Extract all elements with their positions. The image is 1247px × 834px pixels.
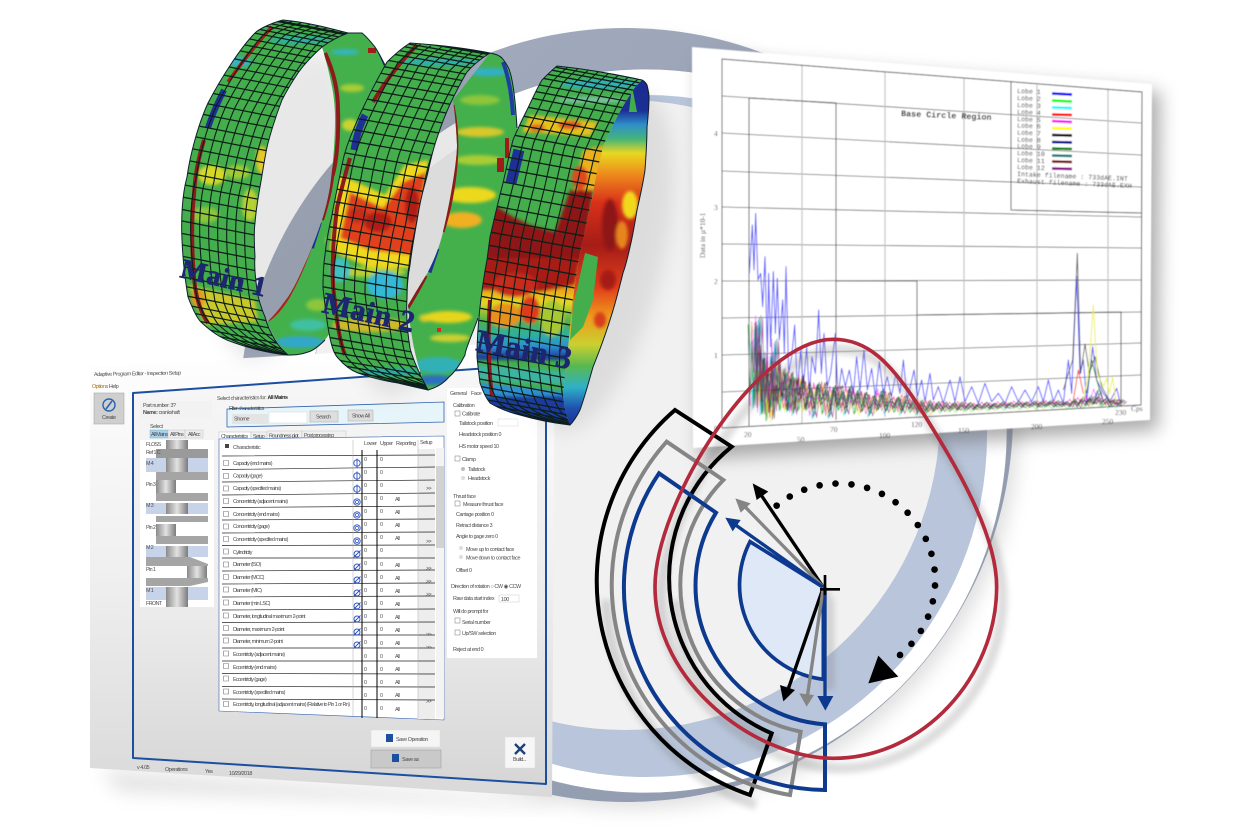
ring 2 inner surface: [408, 54, 517, 390]
settings panel: Calibration: [453, 403, 475, 409]
filter group: [227, 402, 444, 427]
settings panel: Headstock position 0: [459, 432, 501, 438]
row labels and values: Capacity (specified mains): [233, 486, 281, 492]
legend: Lobe 6: [1017, 123, 1041, 131]
row labels and values: 0: [380, 614, 383, 620]
angle arrows: [725, 483, 833, 711]
vertical grid: [802, 65, 1108, 423]
row labels and values: 0: [380, 470, 383, 476]
save as button: [371, 750, 441, 768]
blue content frame: [133, 364, 546, 784]
status bar: Yes: [205, 769, 213, 775]
filter group: Show All: [352, 414, 370, 420]
settings panel: Move up to contact face: [466, 547, 514, 553]
y axis ticks: 1: [714, 351, 718, 360]
row labels and values: 0: [380, 575, 383, 581]
y axis ticks: 3: [714, 203, 718, 212]
table header: Reporting: [396, 441, 416, 447]
row labels and values: 0: [380, 693, 383, 699]
disc shadow: [249, 39, 1019, 809]
row labels and values: 0: [380, 562, 383, 568]
row labels and values: All: [395, 667, 400, 673]
row labels and values: All: [395, 641, 400, 647]
filter group: Shome: [234, 416, 249, 422]
chart shadow: [700, 58, 1160, 458]
setup column shading: [418, 449, 435, 719]
ring: main 3: [476, 66, 650, 426]
ring 3 inner surface: [563, 80, 648, 424]
legend: Lobe 10: [1017, 150, 1045, 158]
row labels and values: All: [395, 589, 400, 595]
row labels and values: 0: [380, 483, 383, 489]
cam diagram shadow: [606, 349, 1003, 805]
row labels and values: 0: [380, 535, 383, 541]
chart sheet: [692, 47, 1152, 448]
tolerance symbols: [354, 458, 360, 648]
select heading: Select characteristics for: All Mains: [217, 395, 288, 402]
crankshaft diagram: M 1: [146, 588, 154, 594]
part info: Part number: 3?: [143, 403, 176, 409]
save operation button: [371, 730, 440, 747]
row labels and values: 0: [364, 574, 367, 580]
y axis ticks: [714, 129, 718, 433]
disc blue band: [305, 95, 987, 777]
row labels and values: Diameter (ISO): [233, 562, 262, 568]
rotation arrowhead: [868, 656, 898, 683]
ring 1 outer surface: [182, 20, 346, 354]
selection tabs: All Pins: [170, 432, 184, 438]
settings panel: Carriage position 0: [456, 512, 494, 518]
y axis ticks: 0: [714, 424, 718, 433]
chart: base circle region: [692, 47, 1152, 448]
row labels and values: Concentricity (gage): [233, 524, 270, 530]
row labels and values: 0: [364, 470, 367, 476]
crankshaft diagram: Pin 3: [146, 482, 156, 488]
legend: Lobe 12: [1017, 164, 1045, 172]
row labels and values: All: [395, 563, 400, 569]
row labels and values: 0: [380, 457, 383, 463]
row labels and values: 0: [380, 548, 383, 554]
ring 1 inner surface: [267, 34, 385, 354]
settings panel: Tailstock position: [459, 421, 493, 427]
ring: main 1: [181, 20, 386, 356]
part info: Select: [150, 424, 163, 430]
legend: Lobe 7: [1017, 130, 1041, 138]
settings panel: Calibrate: [462, 412, 480, 418]
build button: Build...: [513, 757, 526, 763]
table header: Characteristic: [233, 445, 261, 451]
row labels and values: 0: [380, 627, 383, 633]
row labels and values: 0: [380, 654, 383, 660]
row labels and values: All: [395, 510, 400, 516]
pivot cross: [820, 575, 840, 595]
label: main 2: Main 2: [319, 287, 418, 339]
row labels and values: >>: [426, 699, 432, 705]
row labels and values: All: [395, 680, 400, 686]
background disc: [239, 28, 1013, 802]
row labels and values: 0: [364, 627, 367, 633]
crankshaft diagram: M 3: [146, 503, 154, 509]
crankshaft diagram: Pin 2: [146, 525, 156, 531]
x axis ticks: 20: [744, 430, 752, 439]
selection tabs: All Acc: [188, 432, 201, 438]
row labels and values: 0: [364, 614, 367, 620]
y axis title: Data in µ*10-1: [698, 212, 707, 258]
save operation button: Save Operation: [396, 737, 428, 743]
row labels and values: >>: [426, 632, 432, 638]
row labels and values: Eccentricity (adjacent mains): [233, 652, 285, 658]
selection tabs: All Mains: [151, 432, 168, 438]
row labels and values: 0: [364, 667, 367, 673]
software window: [90, 340, 555, 797]
arrow: blue upper: [725, 518, 823, 587]
settings panel: Reject at end 0: [453, 647, 484, 653]
ring 3 outline: [477, 66, 649, 425]
ring 1 grid: [182, 20, 346, 354]
row labels and values: Eccentricity (specified mains): [233, 690, 286, 696]
selection tabs: [150, 430, 203, 438]
row labels and values: >>: [426, 645, 432, 651]
settings panel: General: [450, 391, 467, 397]
legend: [1017, 88, 1132, 190]
blue sector: [624, 473, 825, 790]
arrow: grey lower: [799, 587, 823, 707]
legend: Lobe 2: [1017, 95, 1041, 103]
menu bar: Options Help: [92, 384, 119, 390]
x axis ticks: 250: [1102, 417, 1114, 426]
row labels and values: 0: [380, 601, 383, 607]
settings panel: HS motor speed 10: [459, 444, 499, 450]
row labels and values: 0: [380, 641, 383, 647]
table grid: [222, 455, 435, 700]
table tabs: Setup: [253, 434, 265, 440]
trace bundle: [748, 315, 1127, 422]
y axis ticks: 2: [714, 277, 718, 286]
title bar text: Adaptive Program Editor - Inspection Setup: [94, 370, 181, 378]
row labels and values: Eccentricity (gage): [233, 677, 267, 683]
row labels and values: All: [395, 523, 400, 529]
row labels and values: All: [395, 536, 400, 542]
row labels and values: 0: [380, 496, 383, 502]
row labels and values: >>: [426, 592, 432, 598]
settings panel: Face: [471, 391, 482, 397]
row labels and values: Concentricity (adjacent mains): [233, 499, 288, 505]
crankshaft diagram: Pin 1: [146, 567, 156, 573]
column rules: [362, 450, 377, 718]
trace: lobe 1: [749, 213, 1120, 403]
row labels and values: Cylindricity: [233, 550, 253, 556]
inner sector: [740, 542, 823, 679]
row labels and values: Concentricity (end mains): [233, 512, 280, 518]
legend: Lobe 4: [1017, 109, 1041, 117]
status bar: v 4.05: [137, 765, 150, 771]
dotted rotation arc: [777, 484, 935, 655]
ring shadows: [187, 37, 702, 447]
legend: Exhaust filename : 733dAE.EXH: [1017, 178, 1132, 190]
row labels and values: Capacity (gage): [233, 474, 263, 480]
settings panel: Retract distance 3: [456, 523, 493, 529]
trace peaks near 230 Cps: [1063, 253, 1120, 402]
ring 3 outer surface: [478, 66, 642, 424]
save as button: Save as: [402, 757, 419, 763]
legend: Lobe 11: [1017, 157, 1045, 165]
ring 2 outer surface: [324, 44, 489, 390]
row labels and values: All: [395, 615, 400, 621]
settings panel: Move down to contact face: [466, 556, 521, 562]
table header: Setup: [420, 440, 432, 446]
settings panel: Tailstock: [468, 467, 486, 473]
create button: Create: [102, 415, 116, 421]
filter group: Filter characteristics: [229, 406, 265, 412]
row labels and values: Diameter, longitudinal maximum 2-point: [233, 614, 306, 620]
status bar: 10/29/2018: [229, 771, 252, 777]
row labels and values: 0: [380, 667, 383, 673]
settings panel: Measure thrust face: [463, 502, 503, 508]
data traces: [748, 213, 1127, 422]
ring 2 outline: [323, 43, 517, 390]
row labels and values: Eccentricity, longitudinal (adjacent mains) (Relative to Pin 1 or Rn): [233, 702, 350, 708]
status bar: Operations: [165, 767, 188, 773]
settings panel: [447, 388, 537, 658]
row labels and values: All: [395, 602, 400, 608]
table tabs: Post processing: [304, 433, 334, 439]
table header: [225, 440, 432, 451]
window body: [90, 340, 555, 797]
x axis ticks: 50: [797, 435, 805, 444]
label: main 3: Main 3: [474, 323, 576, 376]
settings panel: Clamp: [462, 457, 476, 463]
row labels and values: >>: [426, 579, 432, 585]
crankshaft diagram: M 4: [146, 461, 154, 467]
row labels and values: 0: [364, 522, 367, 528]
ring 2 grid: [324, 44, 489, 390]
x axis ticks: 150: [958, 426, 970, 435]
row labels and values: Diameter (min LSC): [233, 601, 271, 607]
legend: Lobe 9: [1017, 143, 1041, 151]
legend: Lobe 3: [1017, 102, 1041, 110]
legend: Intake filename : 733dAE.INT: [1017, 171, 1128, 183]
row labels and values: 0: [364, 483, 367, 489]
table tabs: Roundness plot: [269, 434, 299, 440]
row labels and values: Capacity (end mains): [233, 461, 273, 467]
x axis ticks: 200: [1031, 422, 1042, 431]
row labels and values: 0: [364, 588, 367, 594]
row labels and values: Diameter (MIC): [233, 588, 262, 594]
horizontal grid: [722, 96, 1141, 392]
settings panel: Direction of rotation ○ CW ◉ CCW: [451, 584, 522, 590]
row labels and values: 0: [364, 457, 367, 463]
row labels and values: 0: [364, 601, 367, 607]
row labels and values: [233, 457, 432, 713]
table header: Upper: [380, 441, 393, 447]
label: main 1: Main 1: [177, 254, 270, 304]
ring: main 2: [322, 42, 518, 391]
disc white face: [283, 69, 1007, 793]
cam diagram: [597, 339, 997, 795]
settings panel: Will do prompt for: [453, 609, 489, 615]
scrollbar: [436, 448, 444, 718]
ring 3 grid: [478, 66, 642, 424]
table header: Lower: [364, 441, 377, 447]
row labels and values: >>: [426, 486, 432, 492]
disc grey rim: [239, 28, 1013, 802]
row labels and values: 0: [364, 706, 367, 712]
cam lobe outline: [655, 339, 997, 758]
crankshaft diagram: M 2: [146, 545, 154, 551]
black sector: [597, 410, 772, 795]
ring 1 outline: [182, 20, 385, 355]
row labels and values: 0: [364, 535, 367, 541]
row labels and values: All: [395, 707, 400, 713]
filter group: Search: [316, 414, 331, 420]
settings panel: Raw data start index: [453, 596, 495, 602]
settings panel: Headstock: [468, 476, 491, 482]
row labels and values: All: [395, 693, 400, 699]
row labels and values: Eccentricity (end mains): [233, 665, 277, 671]
row labels and values: All: [395, 576, 400, 582]
row labels and values: 0: [364, 680, 367, 686]
row labels and values: Diameter, minimum 2-point: [233, 639, 284, 645]
legend: Lobe 5: [1017, 116, 1041, 124]
row labels and values: >>: [426, 566, 432, 572]
row checkboxes: [224, 460, 228, 706]
row labels and values: 0: [364, 693, 367, 699]
settings panel: 100: [501, 597, 509, 603]
crankshaft diagram: FRONT: [146, 601, 163, 607]
crankshaft diagram: Ref 1 C: [146, 450, 161, 456]
settings panel: Thrust face: [453, 494, 476, 500]
arrow: black lower: [780, 587, 823, 701]
x axis ticks: Cps: [1131, 404, 1143, 413]
build button: [505, 737, 535, 768]
x axis ticks: 230: [1115, 408, 1126, 417]
create button: [94, 393, 124, 424]
chart title: Base Circle Region: [901, 109, 992, 123]
row labels and values: 0: [364, 509, 367, 515]
x axis ticks: 120: [911, 420, 922, 429]
grey sector: [612, 442, 801, 795]
part info: [140, 401, 212, 430]
row labels and values: 0: [364, 561, 367, 567]
row labels and values: Diameter (MCC): [233, 575, 265, 581]
row labels and values: All: [395, 628, 400, 634]
arrow: blue lower: [817, 587, 833, 711]
arrow: black upper: [753, 483, 823, 587]
x axis ticks: [744, 404, 1143, 444]
row labels and values: 0: [380, 522, 383, 528]
row labels and values: 0: [380, 509, 383, 515]
table tabs: [219, 431, 346, 440]
disc inner face: [310, 100, 940, 730]
crankshaft diagram: [140, 440, 214, 607]
characteristics table: [219, 436, 444, 720]
row labels and values: 0: [364, 654, 367, 660]
row labels and values: 0: [364, 640, 367, 646]
y axis ticks: 4: [714, 129, 718, 138]
window shadow: [100, 770, 556, 806]
row labels and values: 0: [364, 548, 367, 554]
row labels and values: 0: [380, 588, 383, 594]
part info: Name: crankshaft: [143, 410, 180, 416]
row labels and values: 0: [364, 496, 367, 502]
arrow: grey upper: [735, 498, 823, 587]
table tabs: Characteristics: [221, 434, 249, 440]
row labels and values: Concentricity (specified mains): [233, 537, 289, 543]
x axis ticks: 70: [830, 425, 838, 434]
settings panel: Angle to gage zero 0: [456, 534, 498, 540]
row labels and values: All: [395, 497, 400, 503]
row labels and values: 0: [380, 706, 383, 712]
legend: Lobe 8: [1017, 137, 1041, 145]
settings panel: Offset 0: [456, 568, 472, 574]
row labels and values: >>: [426, 539, 432, 545]
x axis ticks: 100: [879, 431, 890, 440]
plot frame and stepped limit lines: [722, 59, 1142, 428]
row labels and values: All: [395, 654, 400, 660]
row labels and values: Diameter, maximum 2-point: [233, 627, 285, 633]
crankshaft diagram: FLOSS: [146, 442, 162, 448]
settings panel: Up/SW selection: [462, 631, 496, 637]
settings panel: Serial number: [462, 620, 491, 626]
row labels and values: 0: [380, 680, 383, 686]
legend: Lobe 1: [1017, 88, 1041, 96]
